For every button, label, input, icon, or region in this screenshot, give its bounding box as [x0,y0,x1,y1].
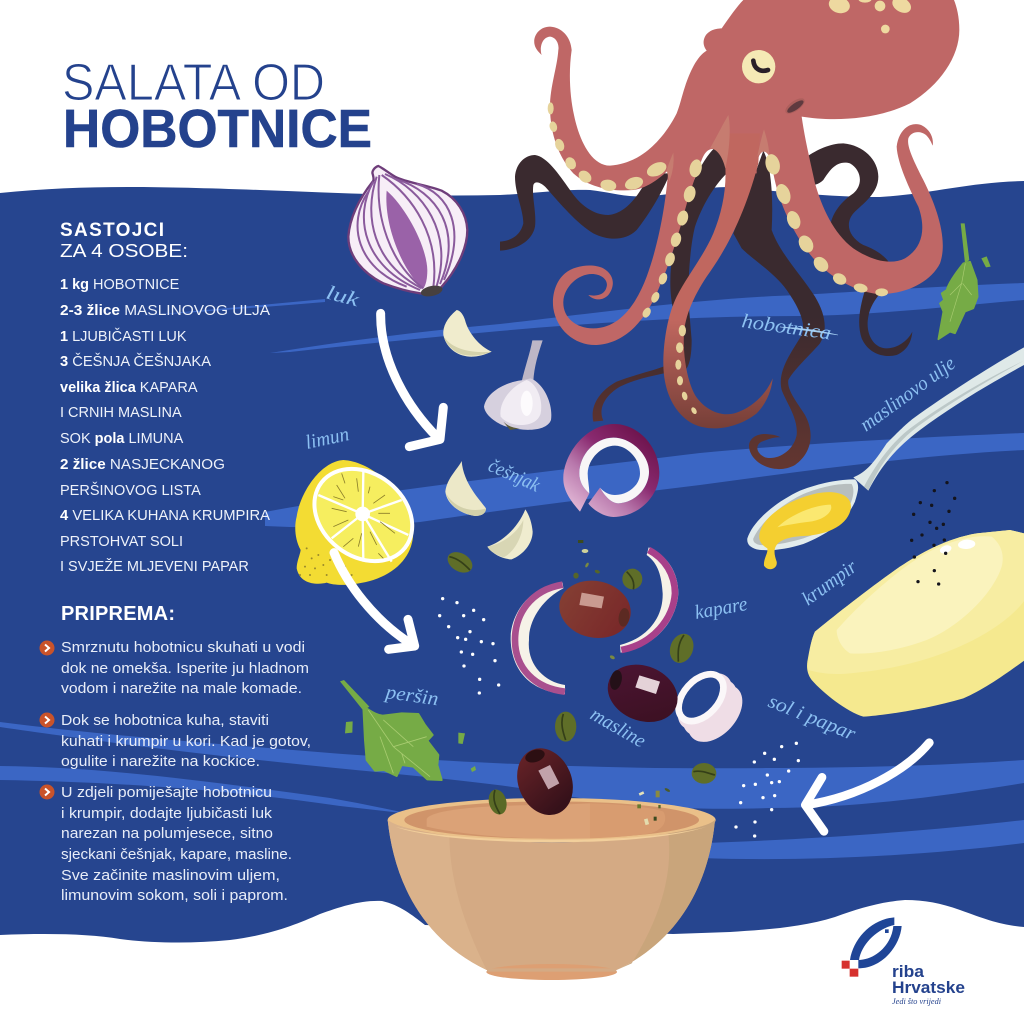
arrow: lemon to mix [334,553,415,649]
bowl front [388,820,715,980]
octopus eye [742,50,775,83]
illustration: black pepper [910,481,956,586]
octopus head spots [827,0,914,33]
panel: preparation [40,603,311,904]
ingredient list: PERŠINOVOG LISTA [60,482,201,499]
illustration: garlic cloves and bulb [443,310,551,559]
arrow: onion to mix [381,313,443,447]
logo tagline: Jedi što vrijedi [892,996,942,1006]
ingredient list: 3 ČEŠNJA ČEŠNJAKA [60,353,211,370]
step 3 text [61,785,292,904]
logo wordmark: riba [892,963,925,981]
olive 2 [599,655,686,732]
octopus suckers [548,102,888,415]
illustration: salt right [734,742,800,838]
caper ridges [449,557,715,775]
heading: priprema: PRIPREMA: [61,603,175,625]
garlic clove 2 [445,461,486,516]
white onion ring [667,663,753,752]
step 3 text: limunovim sokom, soli i paprom. [61,888,288,904]
octopus light folds [667,115,769,182]
illustration: potato [807,530,1024,717]
step 1 text [61,640,309,697]
label: masline: masline [586,703,650,752]
illustration: spoon with olive oil [747,347,1024,569]
illustration: bowl, olives, onion pieces, capers, parsley, salt [340,540,753,980]
ingredient list: 1 LJUBIČASTI LUK [60,328,187,345]
logo wordmark: Hrvatske [892,979,965,997]
step 2 text: ogulite i narežite na kockice. [61,754,260,770]
logo: riba Hrvatske [842,917,965,1006]
label: limun: limun [303,423,351,454]
label: sol i papar: sol i papar [765,690,859,745]
garlic clove 1 [443,310,492,357]
ingredient list [60,277,270,575]
panel: ingredients [60,220,270,575]
step 2 text [61,713,311,770]
octopus dark back arms [500,143,912,469]
ingredient list: velika žlica KAPARA [60,380,198,396]
ingredient list: 1 kg HOBOTNICE [60,277,180,293]
ingredient list: SOK pola LIMUNA [60,431,184,447]
step 1 text: vodom i narežite na male komade. [61,681,302,697]
logo wordmark [892,963,965,997]
step 1 text: Smrznutu hobotnicu skuhati u vodi [61,640,305,656]
octopus lower middle arm [663,133,773,428]
step 2 text: Dok se hobotnica kuha, staviti [61,713,269,729]
title: HOBOTNICE [63,99,372,159]
octopus siphon [783,95,807,117]
ingredient list: PRSTOHVAT SOLI [60,534,183,550]
herb specks [573,540,671,825]
step 3 text: sjeckani češnjak, kapare, masline. [61,847,292,863]
logo fish mark [842,917,902,977]
title [62,54,372,159]
illustration: red onion ring [563,424,659,517]
label: hobotnica: hobotnica [740,310,832,344]
step 1 text: dok ne omekša. Isperite ju hladnom [61,661,309,677]
panel: blue sea background [0,181,1024,943]
heading: sastojci: SASTOJCI [60,220,164,241]
label: cesnjak: češnjak [485,454,544,497]
title: SALATA OD [62,54,325,112]
label: kapare: kapare [693,593,749,624]
ingredient list: I CRNIH MASLINA [60,405,182,421]
label: maslinovo ulje: maslinovo ulje [856,352,960,436]
olive 1 [554,574,636,645]
ingredient list: 4 VELIKA KUHANA KRUMPIRA [60,508,270,524]
ingredient list: I SVJEŽE MLJEVENI PAPAR [60,558,249,575]
step 3 text: narezan na polumjesece, sitno [61,826,273,842]
illustration: lemon [293,447,433,585]
step 3 text: Sve začinite maslinovim uljem, [61,868,280,884]
bowl back [388,798,716,842]
capers [444,548,716,784]
parsley left [340,680,476,780]
step 3 text: i krumpir, dodajte ljubičasti luk [61,806,273,822]
salt left [438,597,500,695]
ingredient list: 2-3 žlice MASLINOVOG ULJA [60,303,270,319]
step 3 text: U zdjeli pomiješajte hobotnicu [61,785,272,801]
arrow: potato to bowl [805,743,929,831]
heading: sastojci [60,220,188,261]
illustration: red onion half [348,166,467,298]
illustration: parsley right [938,223,991,339]
illustration: octopus [500,0,959,469]
right onion half ring [620,547,678,653]
spoon bowl and oil [747,479,858,569]
label: persin: peršin [382,681,440,710]
label: krumpir: krumpir [798,556,861,610]
falling olive and caper above bowl [486,740,583,823]
step 2 text: kuhati i krumpir u kori. Kad je gotov, [61,734,311,750]
spoon handle [853,347,1024,491]
label: luk: luk [324,282,363,312]
garlic bulb [484,340,551,430]
octopus head and arms [534,0,959,345]
heading: sastojci: ZA 4 OSOBE: [60,241,188,261]
bullet icons [40,640,54,800]
ingredient list: 2 žlice NASJECKANOG [60,457,225,473]
garlic clove 3 [487,509,533,559]
left onion half ring [511,583,565,694]
